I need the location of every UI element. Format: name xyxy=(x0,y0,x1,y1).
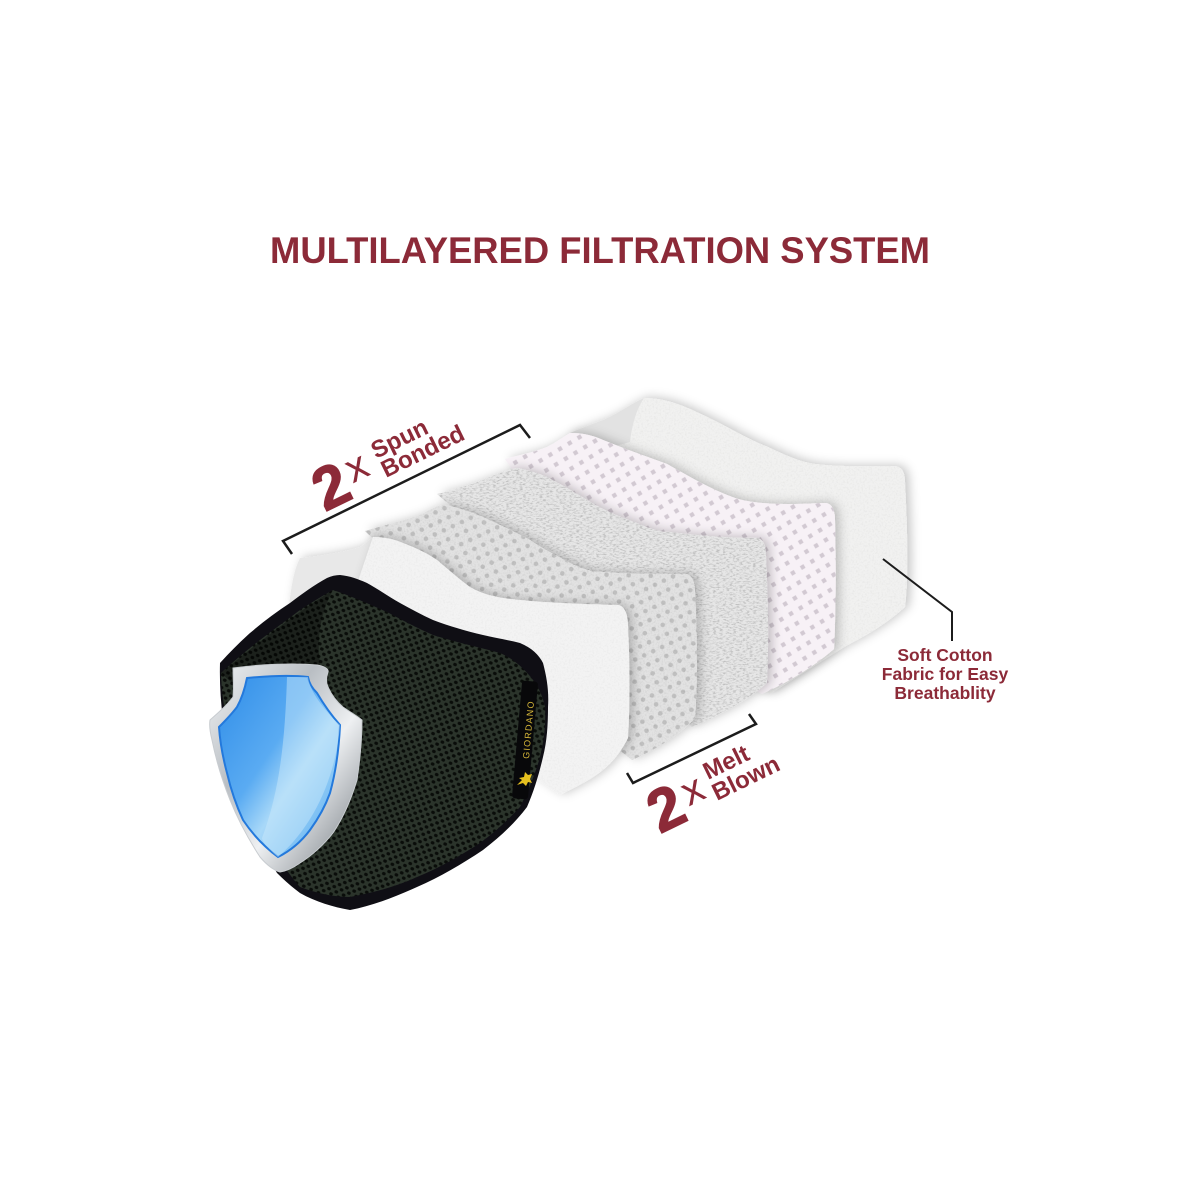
callout: soft cotton fabric: Soft Cotton xyxy=(897,645,993,665)
layer: pink dotted spun bonded xyxy=(505,433,836,694)
callout: soft cotton fabric: Breathablity xyxy=(894,683,996,703)
mask: black mesh face mask xyxy=(220,575,548,910)
multiply sign: X xyxy=(678,774,710,812)
bonded: Bonded xyxy=(377,420,469,483)
bracket: melt blown xyxy=(627,714,756,783)
label: 2 x spun bonded xyxy=(301,414,469,524)
leader line: soft cotton xyxy=(883,559,952,641)
melt: Melt xyxy=(699,740,754,785)
title: MULTILAYERED FILTRATION SYSTEM xyxy=(270,230,930,271)
spun: Spun xyxy=(367,414,433,464)
shield highlight xyxy=(262,677,340,857)
layer: grey dotted melt blown xyxy=(365,505,697,760)
label: 2 x melt blown xyxy=(636,740,784,846)
brand label: GIORDANO xyxy=(521,700,536,759)
layer: front white spun bonded xyxy=(289,537,630,795)
big numeral 2: 2 xyxy=(636,771,696,846)
multiply sign: X xyxy=(342,451,374,489)
shield silver frame xyxy=(210,664,362,872)
layer: back soft cotton fabric xyxy=(570,398,907,694)
mask binding xyxy=(220,575,548,910)
bracket: spun bonded xyxy=(283,425,530,554)
brand label xyxy=(512,681,538,799)
layer: grey melt blown charcoal xyxy=(437,468,768,727)
blown: Blown xyxy=(708,751,784,806)
callout: soft cotton fabric: Fabric for Easy xyxy=(882,664,1008,684)
icon: lion logo xyxy=(517,772,532,786)
callout: soft cotton fabric xyxy=(882,645,1008,703)
shield blue face xyxy=(219,676,340,857)
icon: blue shield xyxy=(210,664,362,872)
mask mesh fabric xyxy=(221,590,545,897)
big numeral 2: 2 xyxy=(301,449,361,524)
mask left panel shading xyxy=(221,590,333,690)
